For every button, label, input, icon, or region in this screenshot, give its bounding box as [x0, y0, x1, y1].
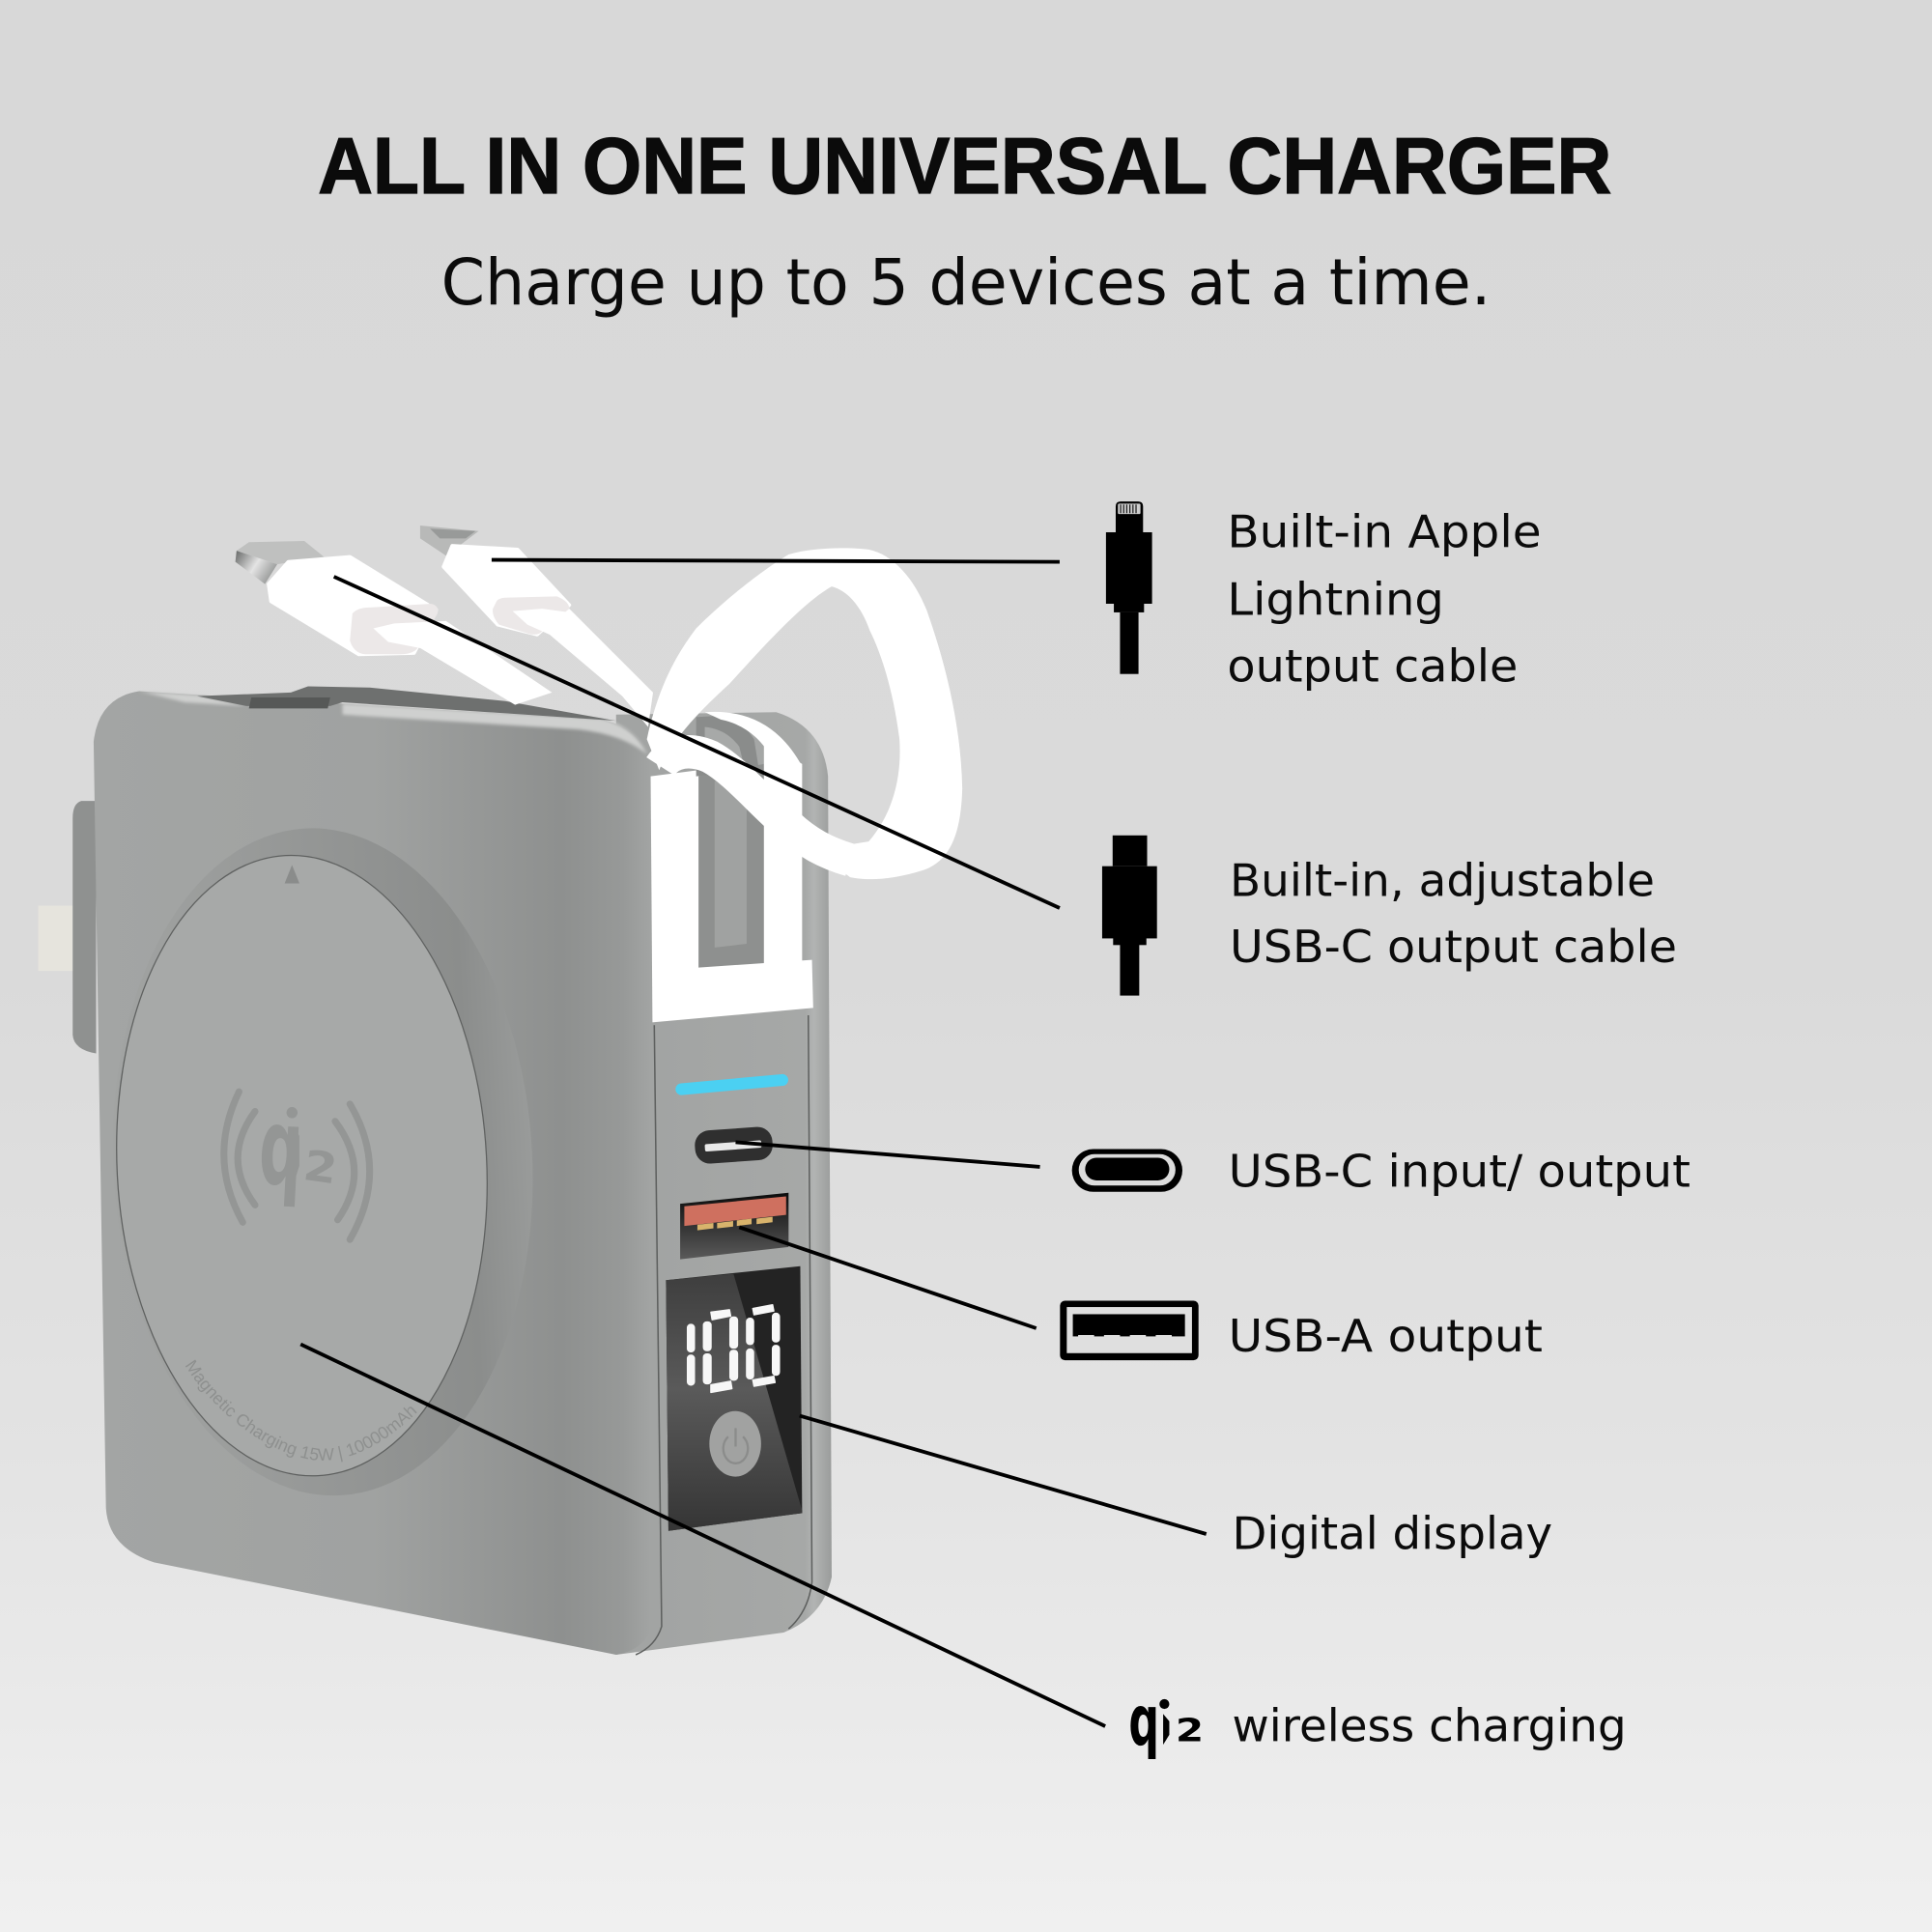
- qi2 mark on disc: q: [256, 1086, 306, 1211]
- label: Lightning: Built-in Apple: [1227, 505, 1542, 557]
- qi2 mark on disc: [224, 1086, 370, 1239]
- front face: [94, 692, 657, 1655]
- side body: [616, 712, 832, 1655]
- power button: [709, 1411, 761, 1477]
- top recess: [139, 686, 647, 754]
- side seams: [636, 1015, 812, 1655]
- cable loop lower ribbon: [661, 752, 850, 860]
- curved disc text: Magnetic Charging 15W | 10000mAh: [185, 1360, 417, 1463]
- alignment arrow: [285, 865, 299, 884]
- label: digital display: Digital display: [1233, 1507, 1552, 1559]
- magnetic disc: [101, 846, 502, 1486]
- cables and connectors: [236, 526, 962, 879]
- label: Lightning: [1227, 505, 1542, 692]
- magnetic disc outer ring: [97, 817, 550, 1506]
- icon: Lightning cable: [1106, 501, 1152, 674]
- Lightning flat cable: [529, 609, 653, 727]
- leader line: wireless: [300, 1345, 1105, 1726]
- label: USB-C cable: USB-C output cable: [1230, 921, 1677, 973]
- label: Lightning: output cable: [1227, 639, 1518, 692]
- USB-C connector: [236, 541, 446, 654]
- USB-C port: [694, 1126, 774, 1165]
- leader line: USB-A port: [739, 1227, 1037, 1328]
- cable loop upper ribbon: [647, 548, 962, 879]
- digital display: [666, 1266, 802, 1531]
- icon: USB-C port: [1072, 1150, 1182, 1192]
- digits reading 100: [688, 1305, 780, 1392]
- qi2 mark on disc: 2: [300, 1142, 340, 1195]
- icon: qi2 logo: 2: [1176, 1711, 1204, 1748]
- plug tab and prong: [39, 801, 96, 1054]
- leader line: USB-C cable: [334, 577, 1060, 908]
- leader line: USB-C port: [735, 1142, 1040, 1167]
- cable channels on side: [650, 712, 802, 974]
- icon: qi2 logo: q: [1128, 1682, 1159, 1762]
- icon: USB-C cable: [1102, 836, 1157, 996]
- label: USB-A port: USB-A output: [1229, 1310, 1543, 1362]
- leader line: Lightning: [492, 560, 1060, 562]
- USB-C flat cable: [375, 621, 552, 705]
- leader line: display: [800, 1416, 1207, 1534]
- label: wireless charging: wireless charging: [1233, 1699, 1627, 1751]
- white retaining band: [649, 960, 813, 1023]
- icon: USB-A port: [1060, 1301, 1199, 1360]
- label: USB-C cable: [1230, 854, 1677, 973]
- product: power bank with cables: [39, 526, 962, 1656]
- subtitle: Charge up to 5 devices at a time.: [441, 244, 1491, 320]
- title: ALL IN ONE UNIVERSAL CHARGER: [318, 121, 1611, 211]
- label: USB-C cable: Built-in, adjustable: [1230, 854, 1655, 906]
- label: USB-C port: USB-C input/ output: [1229, 1145, 1690, 1197]
- USB-A port: [680, 1193, 788, 1260]
- label: Lightning: Lightning: [1227, 573, 1444, 625]
- icon: qi2 logo: [1128, 1682, 1204, 1762]
- Lightning connector: [420, 526, 569, 635]
- LED indicator: [681, 1080, 782, 1090]
